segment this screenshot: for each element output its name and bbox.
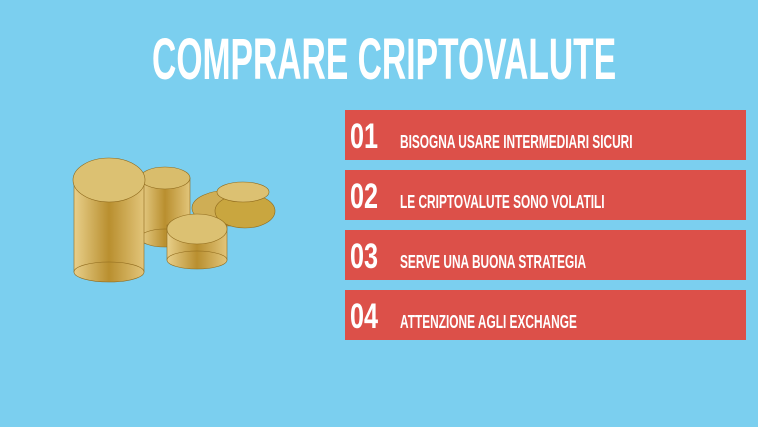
item 04: 04 — [350, 297, 378, 336]
item 02: LE CRIPTOVALUTE SONO VOLATILI — [400, 192, 605, 212]
item 01: 01 — [350, 117, 378, 156]
title: COMPRARE CRIPTOVALUTE — [152, 27, 616, 92]
item 03: 03 — [350, 237, 378, 276]
item 02 — [345, 170, 746, 220]
item 01 — [345, 110, 746, 160]
item 04: ATTENZIONE AGLI EXCHANGE — [400, 312, 577, 332]
item 03 — [345, 230, 746, 280]
icon: coin stacks — [72, 158, 276, 282]
item 01: BISOGNA USARE INTERMEDIARI SICURI — [400, 132, 633, 152]
item 03: SERVE UNA BUONA STRATEGIA — [400, 252, 586, 272]
item 02: 02 — [350, 177, 378, 216]
item 04 — [345, 290, 746, 340]
